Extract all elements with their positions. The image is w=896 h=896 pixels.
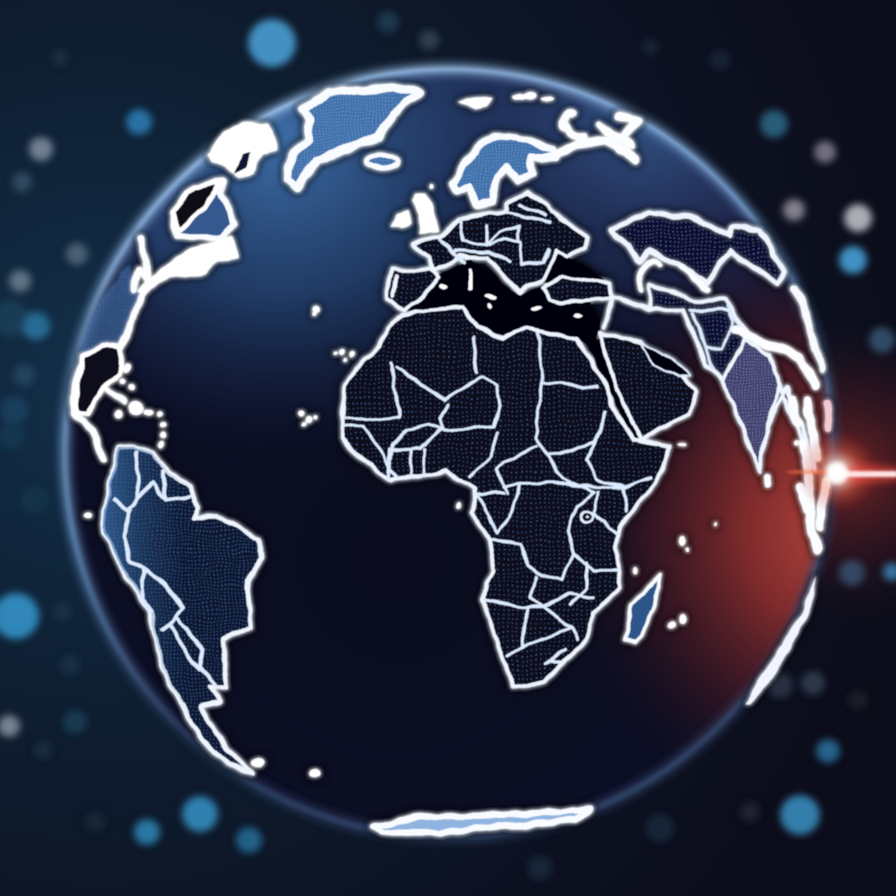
- Indian Ocean islands: [457, 444, 718, 628]
- Antarctica: [373, 810, 590, 832]
- South America borders: [113, 453, 217, 687]
- continents: [73, 88, 829, 832]
- Central Asia outline: [610, 213, 783, 283]
- Atlantic islands: [299, 308, 354, 426]
- Russian arctic coast: [457, 92, 637, 160]
- UK and Ireland: [392, 184, 438, 234]
- Europe country borders: [440, 205, 550, 265]
- Europe: [387, 92, 637, 317]
- Iceland: [367, 155, 397, 167]
- Baffin and Hudson region: [173, 180, 235, 237]
- Africa: [342, 307, 670, 687]
- Madagascar: [624, 575, 660, 642]
- Caribbean islands: [108, 364, 166, 449]
- Asia: [600, 213, 829, 550]
- globe sphere: [64, 68, 834, 838]
- South America: [84, 447, 320, 777]
- East Asia limb: [794, 288, 822, 370]
- Turkey: [543, 277, 613, 303]
- India: [723, 340, 780, 470]
- Labrador coast: [133, 236, 240, 298]
- lower right limb arc: [745, 577, 817, 703]
- Hudson Bay dark: [173, 180, 223, 232]
- Iberia: [387, 270, 437, 310]
- Atlantic coast and Gulf: [73, 297, 140, 460]
- Arabia: [600, 333, 697, 440]
- Africa outline: [342, 307, 670, 687]
- Falkland and Pacific island dots: [84, 512, 320, 777]
- Canadian Arctic islands: [207, 122, 278, 178]
- South America outline: [103, 447, 262, 775]
- Lake Victoria spiral: [581, 511, 593, 523]
- Mediterranean, Black Sea and Red Sea dark water: [403, 250, 645, 442]
- Caspian hook: [639, 261, 708, 290]
- Asia inner borders: [690, 305, 745, 370]
- Africa country borders: [345, 333, 650, 665]
- Scandinavia: [452, 137, 556, 207]
- Lit northern coast region: [78, 265, 140, 357]
- Europe mainland: [413, 193, 587, 293]
- Iran and South Asia coast: [603, 285, 815, 470]
- Mediterranean islands: [438, 270, 581, 317]
- Greenland: [287, 88, 420, 188]
- Southeast Asia streaks: [735, 330, 829, 550]
- Gulf of Mexico: [76, 347, 120, 413]
- lens flare: [786, 430, 896, 514]
- Persian Gulf: [640, 343, 690, 378]
- North America: [73, 122, 278, 460]
- South America lit side: [103, 447, 252, 775]
